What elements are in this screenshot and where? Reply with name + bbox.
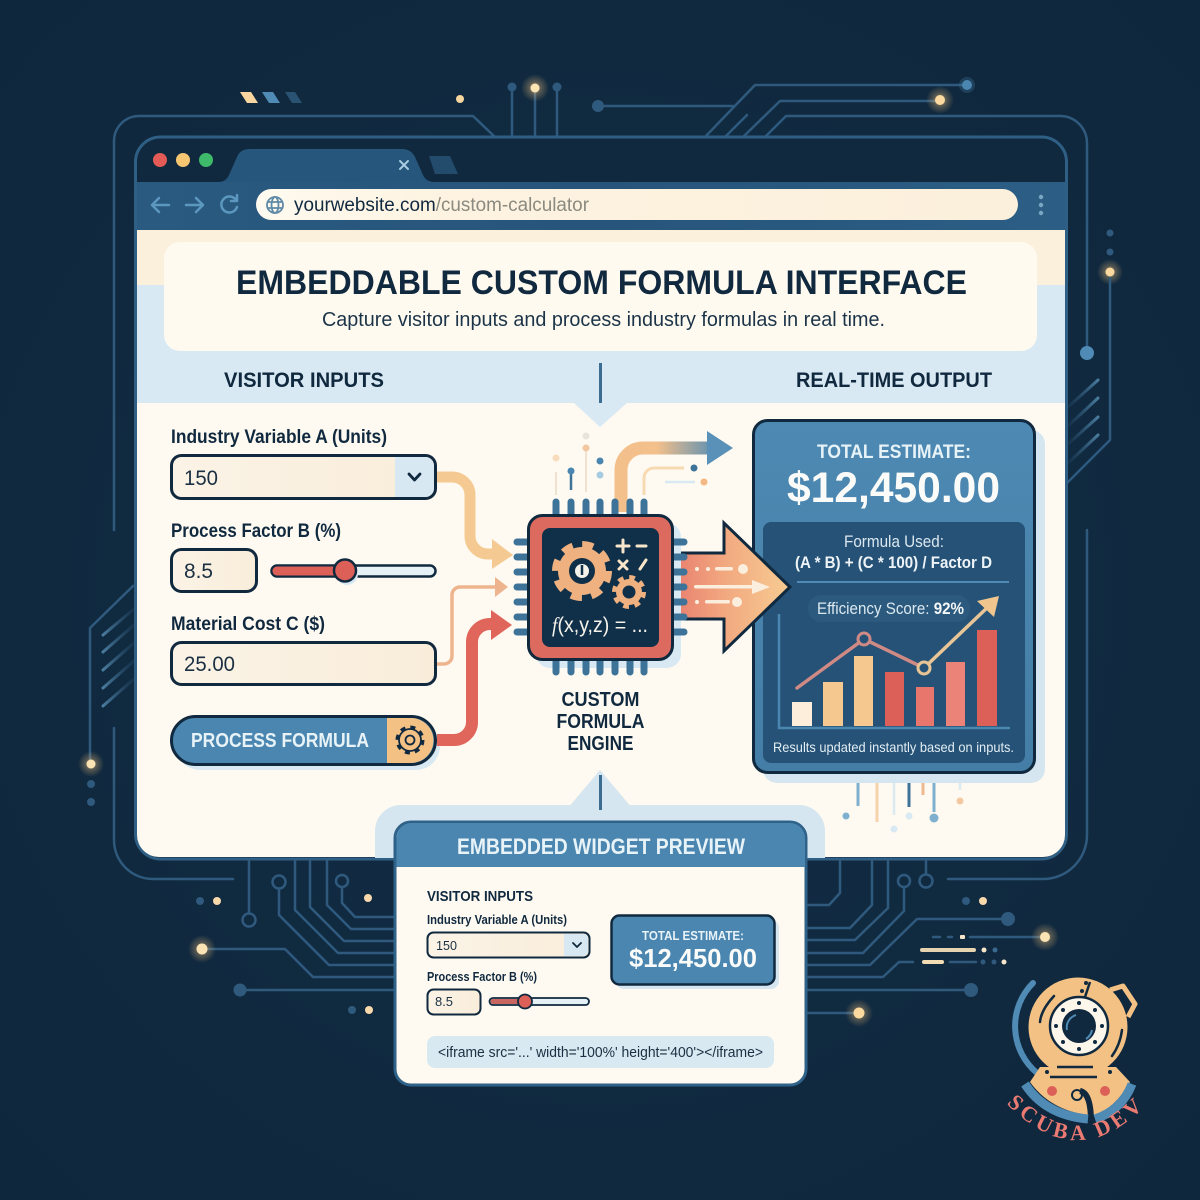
browser frame <box>136 137 1066 859</box>
circuit traces: outer frame <box>114 116 1087 879</box>
engine caption: CUSTOM <box>562 689 640 711</box>
widget field B: Process Factor B (%) <box>427 970 537 984</box>
circuit traces: top <box>456 74 975 137</box>
widget header <box>396 823 805 867</box>
slider <box>272 560 436 585</box>
field: process factor B: 8.5 <box>184 560 213 583</box>
address bar <box>256 189 1018 220</box>
field: industry variable A <box>171 427 436 498</box>
page content <box>137 230 1065 857</box>
logo text: SCUBA DEV <box>1008 1096 1138 1140</box>
column headings <box>224 363 992 427</box>
blue side arc <box>1015 983 1037 1073</box>
widget field A: Industry Variable A (Units) <box>427 913 567 927</box>
menu dots <box>1039 195 1043 215</box>
porthole <box>1050 997 1108 1055</box>
inactive tab <box>429 156 458 174</box>
logo: scuba dev helmet <box>1008 978 1138 1140</box>
formula used: Formula Used: <box>844 532 944 551</box>
output signal dots <box>842 783 964 832</box>
globe icon <box>267 197 283 213</box>
widget field B: 8.5 <box>435 994 453 1009</box>
field: process factor B: Process Factor B (%) <box>171 521 341 542</box>
embed code: <iframe src='...' width='100%' height='400'></iframe> <box>438 1045 763 1061</box>
bar chart <box>779 596 1010 728</box>
field: material cost C <box>171 614 436 684</box>
arrow from variable A <box>437 477 513 569</box>
arrow: engine to output <box>670 523 790 651</box>
field: industry variable A: 150 <box>184 467 218 490</box>
arrow from button <box>437 610 512 740</box>
efficiency score <box>808 595 970 622</box>
widget field A: 150 <box>436 938 457 953</box>
widget field A <box>427 913 590 958</box>
total estimate: $12,450.00 <box>787 464 1000 512</box>
widget header: EMBEDDED WIDGET PREVIEW <box>457 834 745 859</box>
total estimate <box>787 442 1000 512</box>
icon: formula engine chip <box>517 502 684 672</box>
widget result <box>612 916 779 989</box>
back forward reload icons <box>152 195 237 213</box>
helmet dome <box>1028 978 1128 1076</box>
blue collar band <box>1025 1084 1132 1119</box>
widget result: TOTAL ESTIMATE: <box>642 929 744 943</box>
widget slider <box>490 994 589 1008</box>
chip pins <box>517 502 684 672</box>
large gear <box>556 545 608 597</box>
field: industry variable A: Industry Variable A (Units) <box>171 427 387 448</box>
circuit traces: left side <box>78 586 134 806</box>
panel: visitor inputs form <box>171 427 440 770</box>
trend line <box>797 596 999 688</box>
column headings: VISITOR INPUTS <box>224 369 384 392</box>
widget result: $12,450.00 <box>629 943 757 973</box>
panel: embedded widget preview <box>395 822 806 1085</box>
field: material cost C: Material Cost C ($) <box>171 614 325 635</box>
arrow: engine up to output <box>621 431 733 512</box>
title: EMBEDDABLE CUSTOM FORMULA INTERFACE <box>236 264 967 302</box>
efficiency score: Efficiency Score: 92% <box>817 599 964 618</box>
math operators <box>617 540 646 569</box>
chip shadow <box>536 523 681 668</box>
panel: real-time output <box>754 420 1045 783</box>
inner results panel <box>763 522 1025 763</box>
formula used: (A * B) + (C * 100) / Factor D <box>795 553 992 572</box>
widget field B <box>427 970 589 1014</box>
button: process formula <box>172 716 440 770</box>
decorative parallelograms <box>240 92 302 103</box>
results note: Results updated instantly based on inputs. <box>773 739 1014 755</box>
button: process formula: PROCESS FORMULA <box>191 730 369 752</box>
chip body <box>528 516 672 660</box>
field: process factor B <box>171 521 436 592</box>
circuit traces: bottom left <box>188 858 394 1014</box>
url text: yourwebsite.com/custom-calculator <box>294 195 590 216</box>
small gear <box>614 578 644 606</box>
total estimate: TOTAL ESTIMATE: <box>817 442 971 463</box>
formula used <box>795 532 1009 582</box>
embed code <box>427 1036 774 1068</box>
engine caption: ENGINE <box>568 733 634 755</box>
browser window <box>136 137 1066 859</box>
navigation bar <box>137 182 1065 230</box>
collar details <box>1045 1067 1112 1122</box>
column headings: REAL-TIME OUTPUT <box>796 369 992 392</box>
circuit traces: right side <box>1068 230 1123 482</box>
window controls <box>153 153 213 167</box>
formula text: f(x,y,z) = ... <box>552 613 648 637</box>
active tab <box>218 149 435 182</box>
handle <box>1110 986 1135 1017</box>
field: material cost C: 25.00 <box>184 653 235 676</box>
subtitle: Capture visitor inputs and process industry formulas in real time. <box>322 309 885 331</box>
title card <box>164 242 1037 351</box>
arrows: inputs to engine <box>437 477 513 740</box>
icon: gear <box>397 727 423 753</box>
circuit traces: bottom right <box>807 858 1059 1027</box>
engine caption: FORMULA <box>556 711 644 733</box>
connector to widget <box>375 770 825 858</box>
widget heading: VISITOR INPUTS <box>427 888 533 905</box>
arrow from material cost <box>437 577 508 664</box>
engine signal dots <box>552 432 604 495</box>
engine caption <box>556 689 644 755</box>
